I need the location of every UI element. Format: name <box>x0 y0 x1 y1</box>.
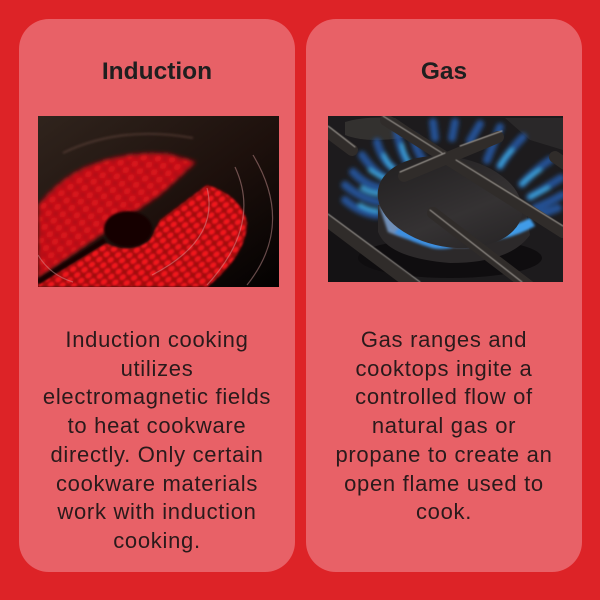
text: gas description: Gas ranges and <box>361 327 527 352</box>
photo: gas burner with blue flames <box>328 116 563 282</box>
grates <box>326 116 565 287</box>
text: induction description: cooking. <box>113 528 201 553</box>
text: gas description <box>335 327 553 524</box>
text: induction description: directly. Only certain <box>50 442 264 467</box>
panel: gas <box>306 19 582 572</box>
text: gas description: open flame used to <box>344 471 544 496</box>
burner ring flames <box>379 205 535 249</box>
grate shadow base <box>358 238 542 278</box>
photo: glowing red induction cooktop <box>38 116 279 287</box>
text: induction description: work with induction <box>57 499 257 524</box>
heading: Induction: Induction <box>102 58 212 85</box>
text: induction description: electromagnetic fields <box>43 384 271 409</box>
text: induction description: Induction cooking <box>65 327 249 352</box>
text: gas description: cook. <box>416 499 472 524</box>
text: induction description <box>43 327 271 553</box>
text: gas description: propane to create an <box>335 442 553 467</box>
text: induction description: to heat cookware <box>68 413 246 438</box>
text: gas description: cooktops ingite a <box>355 356 532 381</box>
heading: Gas: Gas <box>421 58 467 85</box>
text: gas description: controlled flow of <box>355 384 533 409</box>
burner cap <box>370 145 530 259</box>
flames <box>345 122 562 215</box>
text: induction description: utilizes <box>121 356 193 381</box>
burner body <box>378 205 530 263</box>
text: induction description: cookware materials <box>56 471 258 496</box>
text: gas description: natural gas or <box>372 413 516 438</box>
panel: induction <box>19 19 295 572</box>
